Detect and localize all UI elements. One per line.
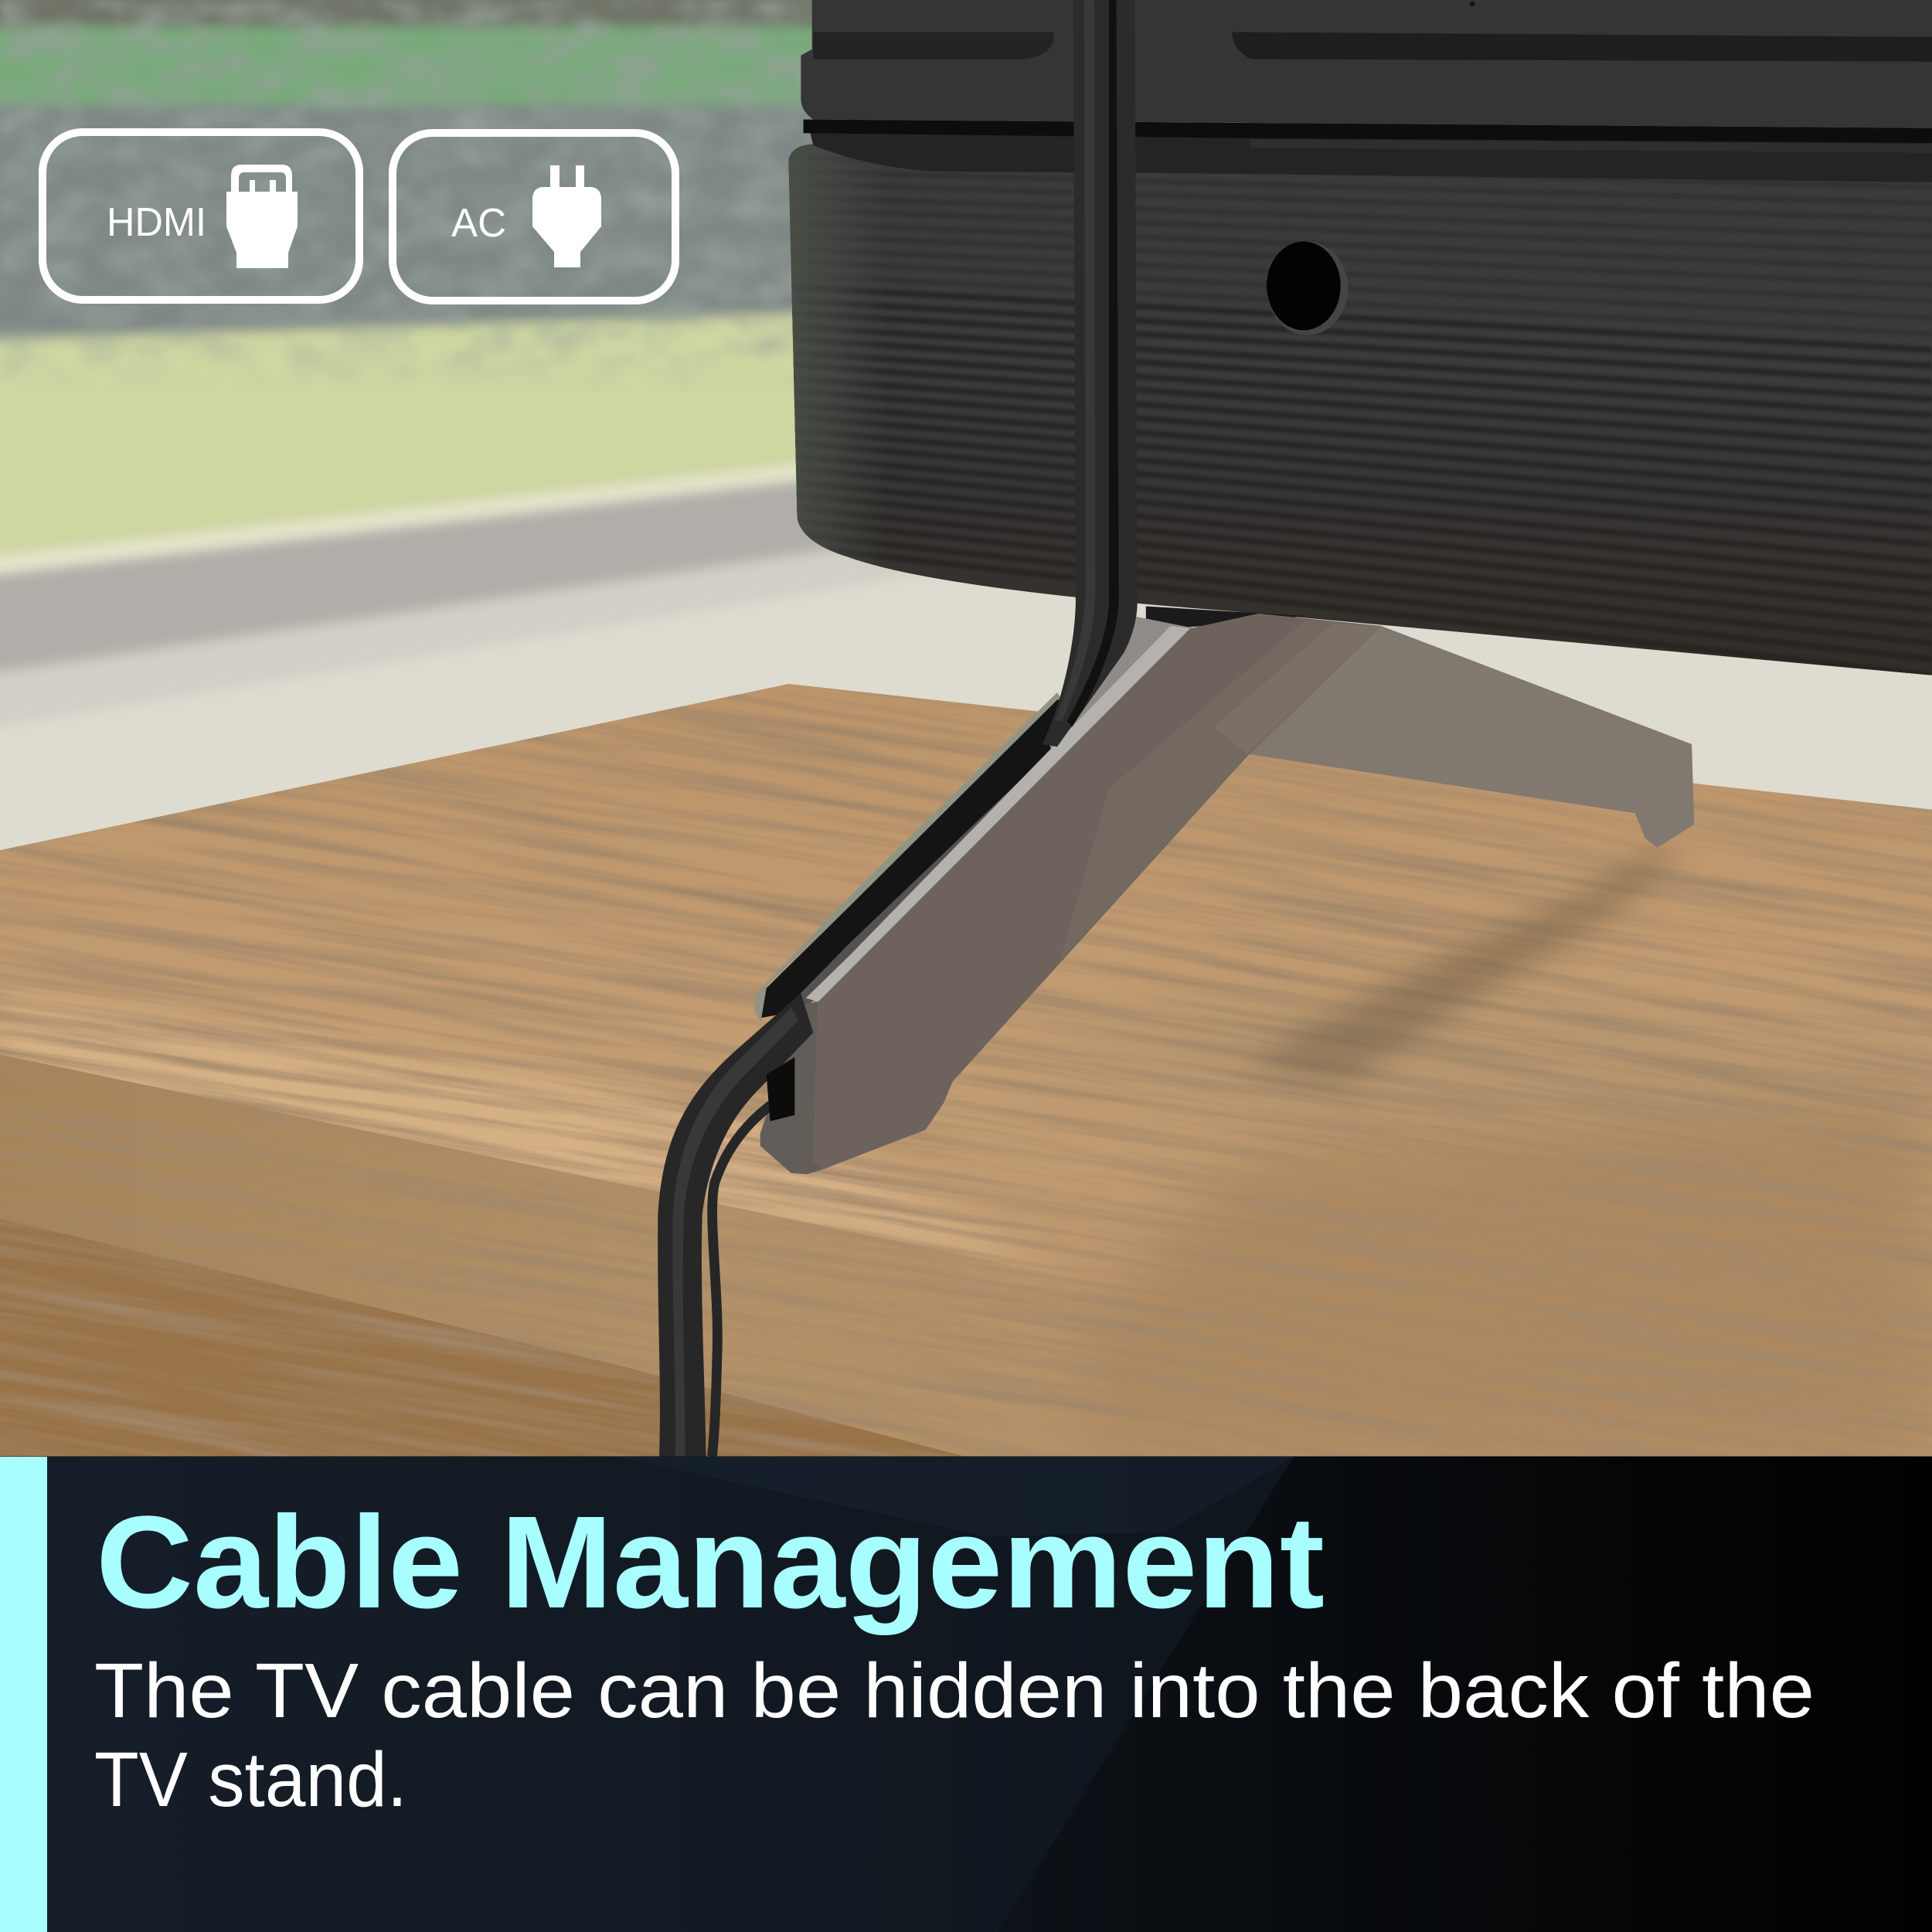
AC label: AC	[451, 201, 506, 246]
brown tint low	[776, 369, 1932, 690]
far leg join facet	[1213, 624, 1381, 754]
wood grain texture	[0, 688, 1932, 1456]
highlight strip	[806, 626, 1190, 1002]
icon: HDMI plug	[226, 165, 298, 268]
darker right foreground	[1084, 1097, 1932, 1457]
description text	[94, 1648, 1815, 1823]
upper cable groove	[1067, 0, 1119, 727]
accent bar	[0, 1457, 47, 1932]
lit band near table edge	[0, 998, 1060, 1269]
grey-green left edge	[776, 123, 887, 616]
table front face	[0, 1055, 1032, 1339]
far leg	[1248, 614, 1694, 848]
table top surface	[0, 684, 1932, 1457]
black mount under tv	[1146, 606, 1306, 631]
thin cable	[713, 1094, 787, 1457]
description text: The TV cable can be hidden into the back of the	[94, 1648, 1815, 1734]
upper cable highlight	[1055, 0, 1095, 721]
stand shadow on table	[1244, 848, 1679, 1084]
main cable	[658, 993, 813, 1457]
recessed slot left	[813, 32, 1053, 60]
back plate green edge	[754, 692, 1062, 1022]
icon: AC plug	[532, 165, 601, 267]
hedge mottling	[0, 0, 813, 394]
photo scene	[0, 0, 1932, 1457]
tv ribbed housing	[776, 123, 1932, 690]
side of foot	[760, 1002, 823, 1174]
description text: TV stand.	[94, 1736, 407, 1823]
round port hole	[1267, 242, 1348, 335]
upper cable bundle	[1043, 0, 1138, 747]
connector block	[767, 1057, 794, 1121]
greyish shade band	[1113, 1008, 1858, 1091]
main cable highlight	[672, 1008, 798, 1457]
strong lower ribs	[788, 287, 1932, 675]
dark gap between housings	[804, 120, 1932, 182]
near leg face	[813, 614, 1381, 1169]
title: Cable Management	[96, 1489, 1325, 1636]
near leg light facet	[1060, 620, 1381, 961]
badge: AC	[393, 133, 675, 301]
panel: caption band	[0, 1457, 1932, 1932]
HDMI label: HDMI	[107, 200, 206, 245]
screw dot	[1470, 2, 1475, 6]
upper grey surface	[1049, 616, 1196, 767]
rail stripes	[791, 759, 1057, 1008]
blurred garden background	[0, 0, 1932, 900]
cables	[658, 0, 1138, 1457]
recessed slot right	[1232, 32, 1932, 62]
wooden table	[0, 684, 1932, 1457]
tv upper housing	[801, 0, 1932, 128]
background facets	[616, 1457, 1932, 1932]
badge: HDMI	[43, 132, 359, 300]
faint upper ribs	[788, 158, 1932, 334]
tv stand	[754, 606, 1694, 1174]
table lower face	[0, 1219, 964, 1457]
cable channel cavity	[761, 690, 1109, 1018]
